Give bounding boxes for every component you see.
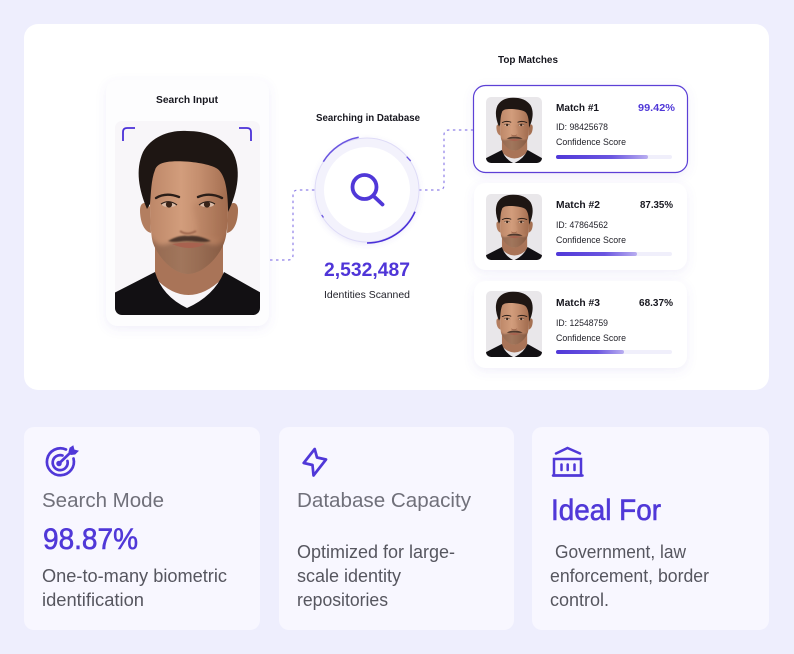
heading: database capacity: Database Capacity — [297, 490, 471, 512]
name: match 1: Match #1 — [556, 102, 599, 114]
name: match 3: Match #3 — [556, 297, 600, 309]
label: identities scanned: Identities Scanned — [324, 289, 410, 301]
scan bracket: right — [239, 128, 251, 141]
search status — [315, 112, 420, 301]
description: database capacity: repositories — [297, 590, 388, 610]
heading: ideal for: Ideal For — [551, 494, 661, 527]
photo: match 3 — [486, 291, 542, 357]
heading: search input: Search Input — [156, 94, 218, 106]
description: ideal for: enforcement, border — [550, 566, 709, 586]
match card 1 — [474, 86, 688, 172]
description: search mode: One-to-many biometric — [42, 566, 227, 586]
connector: search to matches — [419, 130, 473, 190]
panel: search input — [106, 80, 269, 326]
id: match 2: ID: 47864562 — [556, 220, 608, 231]
name: match 2: Match #2 — [556, 199, 600, 211]
heading: top matches: Top Matches — [498, 54, 558, 66]
description: ideal for: Government, law — [555, 542, 687, 562]
match card 2 — [475, 194, 686, 273]
portrait photo — [115, 130, 260, 315]
id: match 3: ID: 12548759 — [556, 318, 608, 329]
label: confidence 2: Confidence Score — [556, 235, 626, 246]
icon: institution — [553, 448, 582, 476]
icon: target — [47, 446, 78, 475]
heading: searching: Searching in Database — [316, 112, 420, 124]
photo: match 2 — [486, 194, 542, 260]
confidence bar 3 — [556, 350, 672, 354]
description: database capacity: Optimized for large- — [297, 542, 455, 562]
connector: input to search — [270, 190, 315, 260]
id: match 1: ID: 98425678 — [556, 122, 608, 133]
confidence bar 1 — [556, 155, 672, 159]
search dial — [315, 137, 419, 243]
panel: ideal for — [532, 427, 769, 630]
score: match 2: 87.35% — [640, 199, 674, 211]
photo: match 1 — [486, 97, 542, 163]
heading: search mode: Search Mode — [42, 490, 164, 512]
icon: lightning bolt — [304, 449, 326, 476]
panel: search mode — [24, 427, 260, 630]
scan bracket: left — [123, 128, 135, 141]
description: ideal for — [550, 542, 709, 610]
description: ideal for: control. — [550, 590, 609, 610]
confidence bar 2 — [556, 252, 672, 256]
description: database capacity — [297, 542, 455, 610]
score: match 3: 68.37% — [639, 297, 674, 309]
panel: search flow — [24, 24, 769, 390]
stat: search mode: 98.87% — [43, 523, 138, 556]
description: search mode — [42, 566, 227, 610]
description: database capacity: scale identity — [297, 566, 401, 586]
description: search mode: identification — [42, 590, 144, 610]
panel: database capacity — [279, 427, 514, 630]
icon: magnifier — [352, 175, 382, 204]
label: confidence 3: Confidence Score — [556, 333, 626, 344]
count: identities: 2,532,487 — [324, 260, 410, 281]
match card 3 — [474, 281, 687, 368]
score: match 1: 99.42% — [638, 102, 676, 114]
label: confidence 1: Confidence Score — [556, 137, 626, 148]
